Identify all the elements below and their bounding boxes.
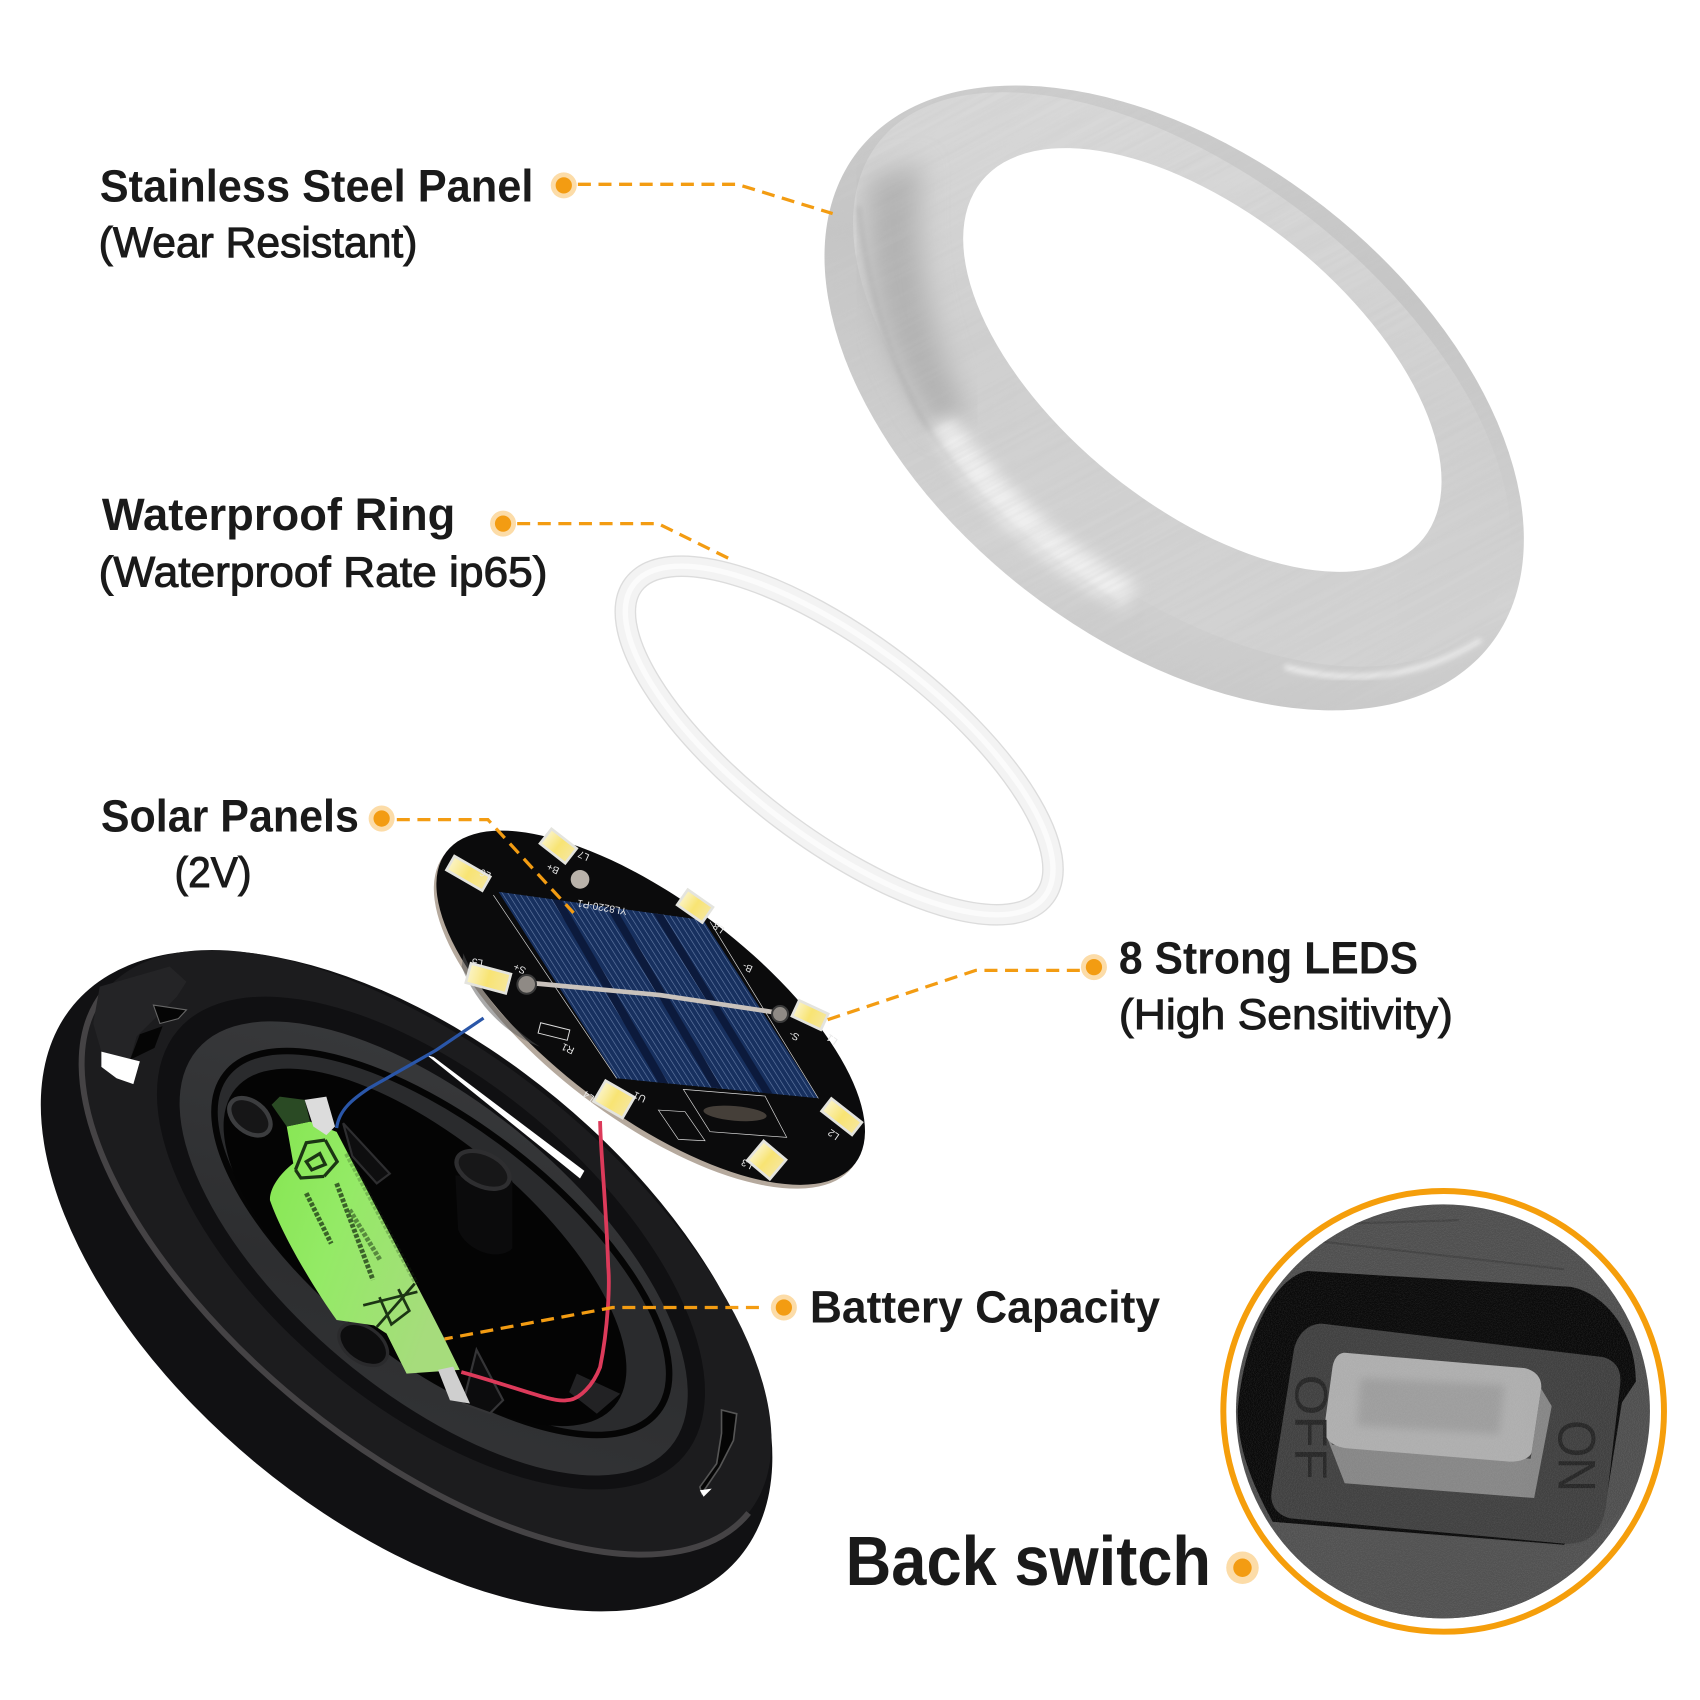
orange circle	[1223, 1191, 1664, 1632]
solar cell	[498, 892, 818, 1098]
callout: battery	[445, 1282, 1161, 1339]
label: Back switch	[846, 1522, 1211, 1600]
stainless steel ring	[824, 86, 1524, 710]
black well	[167, 1007, 683, 1488]
circuit markings: L2	[826, 1126, 842, 1142]
circuit markings: S-	[788, 1028, 801, 1042]
circuit markings: L3	[740, 1156, 755, 1171]
reflections	[462, 953, 540, 1047]
circuit markings: B+	[545, 860, 561, 876]
mounting clip lower right	[700, 1410, 737, 1497]
shadow channel	[1238, 1271, 1636, 1545]
inner wall	[154, 983, 729, 1503]
grey gasket band	[105, 940, 763, 1557]
battery	[270, 1097, 470, 1403]
circuit markings: L4	[581, 1088, 597, 1103]
label: 8 Strong LEDS	[1119, 933, 1418, 984]
callout: back switch	[846, 1522, 1259, 1600]
white slot	[427, 1055, 584, 1179]
circuit markings: L7	[576, 847, 591, 862]
circuit markings	[471, 847, 842, 1171]
circuit markings: L6	[478, 866, 493, 881]
callout: stainless steel panel: (Wear Resistant)	[99, 219, 417, 266]
mounting clip upper left	[93, 967, 186, 1084]
callout: LEDs	[826, 933, 1453, 1038]
slide switch	[1324, 1353, 1552, 1498]
rubber grain	[1234, 1203, 1652, 1620]
callout: waterproof ring: (Waterproof Rate ip65)	[99, 549, 548, 596]
solar PCB	[434, 827, 865, 1189]
circuit markings: S+	[512, 960, 528, 976]
red wire	[461, 1121, 609, 1401]
housing top face	[0, 839, 872, 1666]
OFF label: OFF	[1286, 1375, 1337, 1480]
rubber base	[1234, 1203, 1652, 1620]
callout: stainless steel panel	[99, 161, 833, 266]
crossed bin mark	[363, 1284, 417, 1327]
housing body	[0, 823, 891, 1700]
back switch photo	[1223, 1191, 1664, 1632]
solder strip	[517, 870, 788, 1022]
LEDs	[446, 829, 862, 1179]
circuit markings: L1	[824, 1031, 840, 1047]
label: Waterproof Ring	[102, 489, 455, 540]
circuit markings: L5	[471, 955, 484, 968]
blue wire	[337, 1018, 484, 1128]
circuit markings: L8	[711, 919, 727, 935]
label: Solar Panels	[101, 791, 359, 842]
inner posts	[222, 1090, 620, 1414]
callout: waterproof ring	[99, 489, 729, 596]
housing seam highlight	[82, 991, 749, 1555]
waterproof ring	[575, 507, 1104, 974]
battery print	[306, 1154, 416, 1284]
circuit markings: R1	[560, 1040, 576, 1056]
top ridge lines	[1318, 1220, 1564, 1269]
black housing	[0, 823, 891, 1700]
cell outline	[493, 895, 818, 1098]
lower body	[1265, 1493, 1634, 1618]
recycling mark	[295, 1140, 337, 1178]
board face	[382, 768, 919, 1248]
circuit markings: B-	[741, 960, 755, 974]
terminals	[272, 1097, 310, 1126]
recess	[73, 906, 789, 1580]
callout: solar panels: (2V)	[175, 849, 252, 896]
circuit markings: U1	[631, 1088, 648, 1104]
switch plate	[1271, 1324, 1620, 1544]
callout: solar panels	[101, 791, 574, 913]
board edge	[379, 770, 918, 1252]
circuit markings: YL8220-P1	[576, 897, 628, 916]
title: Stainless Steel Panel	[100, 161, 533, 212]
label: Battery Capacity	[810, 1282, 1161, 1333]
callout: LEDs: (High Sensitivity)	[1119, 991, 1453, 1038]
ON label: ON	[1547, 1420, 1606, 1492]
